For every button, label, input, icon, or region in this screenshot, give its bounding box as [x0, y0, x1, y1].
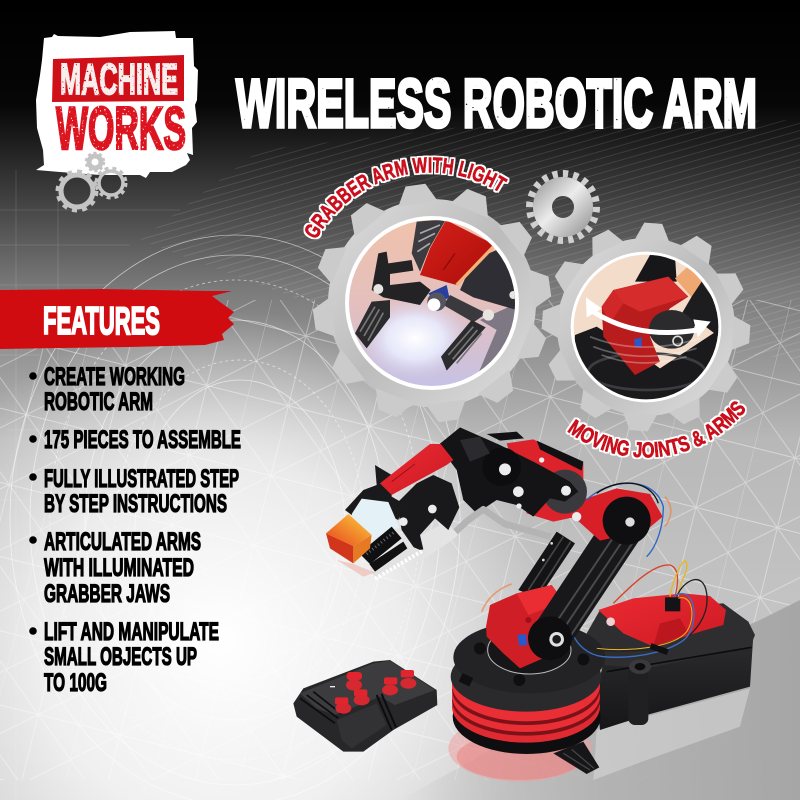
logo white torn patch [36, 31, 198, 178]
bullet: articulated arms: GRABBER JAWS [44, 580, 170, 608]
robotic arm product [326, 427, 755, 782]
large gear: grabber [311, 182, 553, 424]
bullet: articulated arms: WITH ILLUMINATED [44, 554, 194, 582]
bullet: lift small objects: LIFT AND MANIPULATE [44, 618, 219, 646]
bullet: step by step instructions: BY STEP INSTRUCTIONS [44, 490, 227, 518]
main arm beam [533, 506, 648, 652]
curved label: moving joints and arms: MOVING JOINTS & ARMS [566, 400, 747, 460]
wiring [573, 561, 707, 657]
forearm black frame [438, 427, 578, 517]
grabber hub [397, 475, 459, 551]
bullet: create working robotic arm [29, 363, 185, 416]
logo cog gears [58, 153, 126, 210]
top jaw frame [345, 465, 403, 520]
bullet: step by step instructions: FULLY ILLUSTRATED STEP [44, 465, 239, 493]
hub screws [360, 488, 437, 526]
lower joint [528, 616, 572, 660]
bullet: lift small objects [29, 618, 219, 697]
bullet: create working robotic arm: CREATE WORKING [44, 363, 185, 391]
base feet [553, 742, 599, 774]
turntable stack [451, 621, 605, 754]
red cover [380, 444, 453, 495]
base box [587, 603, 755, 730]
rear arm strut [518, 532, 575, 598]
bullet: lift small objects: SMALL OBJECTS UP [44, 643, 197, 671]
logo: Machine Works [36, 31, 198, 210]
held block [326, 514, 375, 577]
bullet: articulated arms [29, 528, 201, 608]
large gear: joints [541, 222, 751, 432]
lower jaw white teeth [369, 542, 422, 579]
bullet: 175 pieces [29, 426, 241, 454]
features list [29, 363, 241, 697]
floor plane [400, 600, 800, 800]
logo red MACHINE block [52, 55, 184, 102]
small decorative gear [530, 174, 596, 240]
forearm red body [507, 439, 583, 522]
forearm and grabber [326, 427, 587, 579]
bullet: 175 pieces: 175 PIECES TO ASSEMBLE [44, 426, 241, 454]
silver arm link [450, 509, 551, 537]
features heading: FEATURES [43, 300, 160, 343]
bullet: articulated arms: ARTICULATED ARMS [44, 528, 201, 556]
logo MACHINE text: MACHINE [60, 55, 178, 104]
ghost white lower jaw arm [407, 522, 458, 562]
light window [352, 499, 399, 540]
motion arc [482, 584, 512, 612]
bullet: create working robotic arm: ROBOTIC ARM [44, 388, 153, 416]
forearm pivot disc [482, 447, 521, 486]
shoulder joint [486, 585, 570, 668]
curved label: grabber arm with light: GRABBER ARM WITH LIGHT [304, 156, 510, 240]
logo WORKS text: WORKS [56, 95, 186, 162]
elbow and upper joint [573, 483, 671, 557]
floor reflection [448, 688, 750, 782]
forearm ribbed collar [460, 437, 490, 462]
robot base and turntable [448, 561, 755, 782]
banner red brush stroke [0, 289, 234, 349]
controller red switches [335, 670, 416, 714]
photo: grabber arm with light [345, 216, 520, 390]
black toothed jaw [359, 527, 402, 564]
white screws [499, 457, 581, 521]
features banner [0, 289, 234, 349]
wireless controller [293, 660, 437, 752]
forearm top rails [487, 432, 583, 471]
bullet: lift small objects: TO 100G [44, 669, 107, 697]
photo: moving joints and arms [570, 250, 723, 403]
circuit board cover [598, 593, 726, 647]
forearm wheel [543, 470, 587, 514]
bullet: step by step instructions [29, 465, 239, 518]
